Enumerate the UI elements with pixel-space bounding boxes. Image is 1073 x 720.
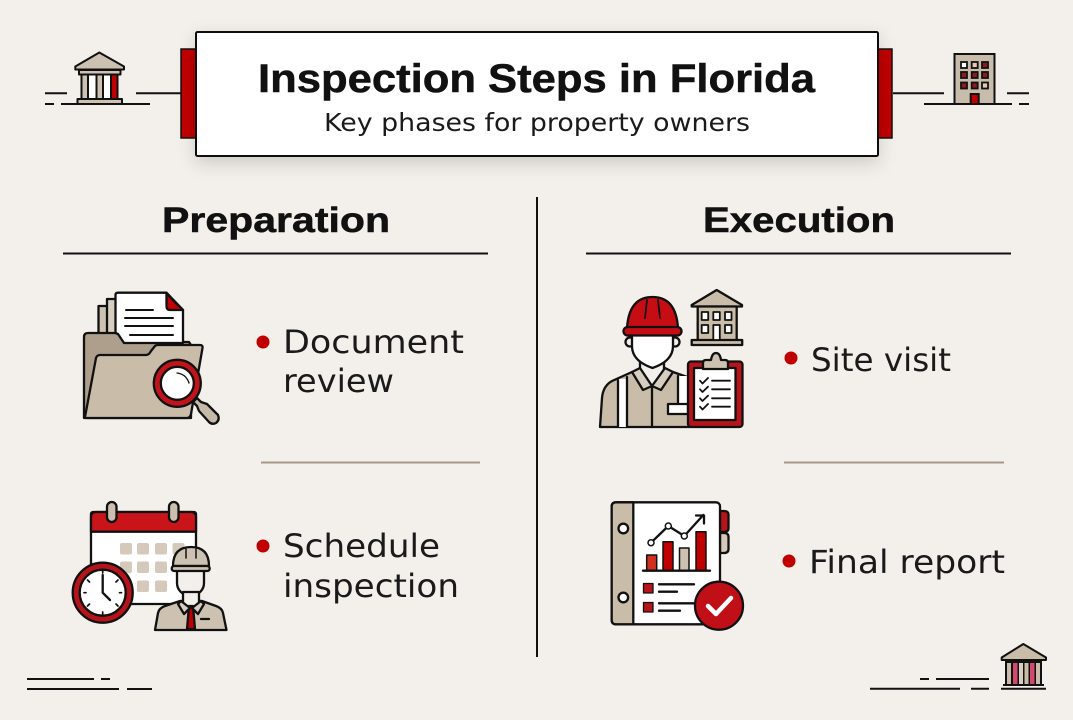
ground lines bottom left xyxy=(27,679,152,689)
bullet text: Schedule inspection: inspection xyxy=(283,567,459,605)
bullet text: Schedule inspection xyxy=(256,527,459,605)
icon: office building top right xyxy=(893,54,1029,104)
heading: Preparation: Preparation xyxy=(162,201,390,240)
icon: folder with magnifier xyxy=(84,293,219,424)
bullet text: Document review: Document xyxy=(283,323,464,361)
icon: inspector with building and clipboard xyxy=(600,290,742,427)
icon: calendar with clock and inspector xyxy=(73,502,226,630)
bullet text: Schedule inspection: Schedule xyxy=(283,527,440,565)
bullet text: Site visit: Site visit xyxy=(811,341,951,379)
icon: report binder with chart and check xyxy=(612,502,743,630)
icon: courthouse bottom right xyxy=(870,644,1046,689)
icon: courthouse top left xyxy=(45,52,181,104)
bullet text: Document review xyxy=(256,323,464,400)
heading: Execution: Execution xyxy=(703,201,895,240)
title banner xyxy=(181,32,892,156)
bullet text: Document review: review xyxy=(283,362,394,400)
title: Inspection Steps in Florida xyxy=(258,57,816,101)
bullet text: Final report: Final report xyxy=(809,543,1005,581)
subtitle: Key phases for property owners xyxy=(324,108,750,137)
